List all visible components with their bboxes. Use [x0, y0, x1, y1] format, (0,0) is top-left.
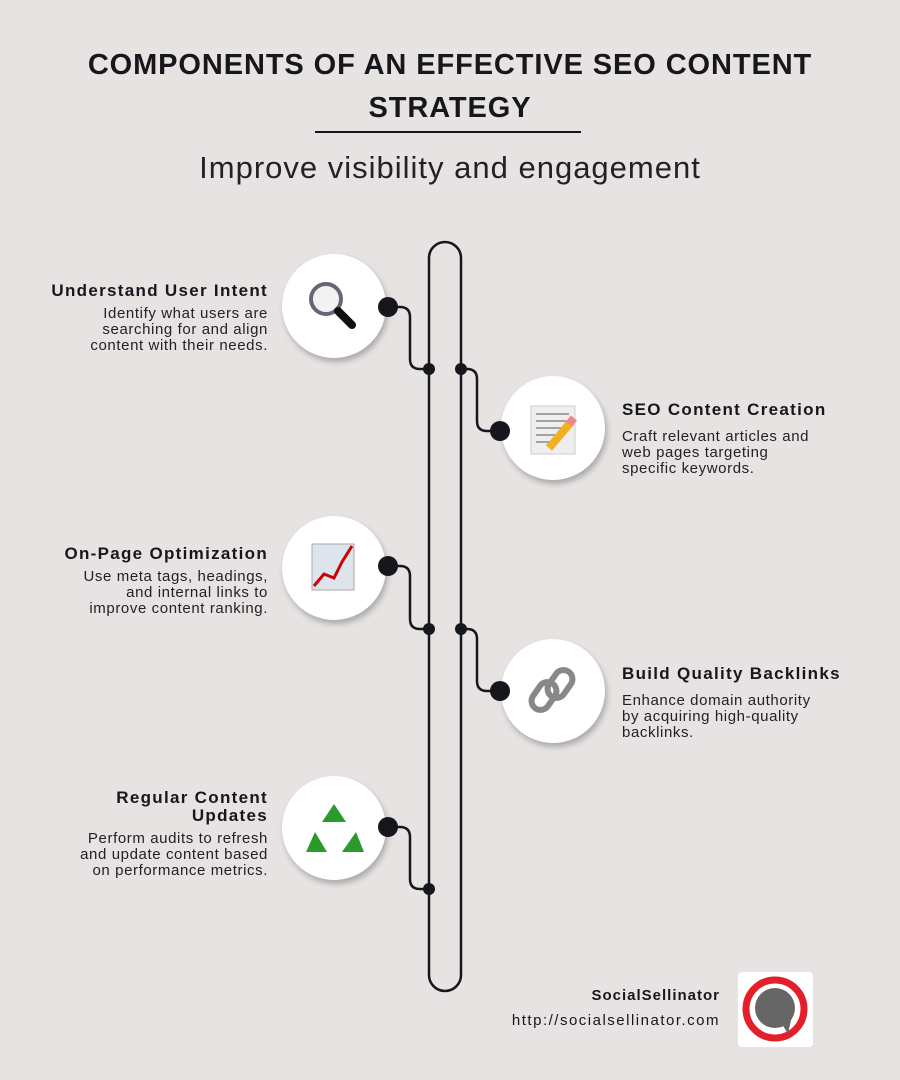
text: Understand User Intent: searching for and align [102, 321, 268, 338]
text: SEO Content Creation: SEO Content Creation [622, 400, 827, 419]
text: Regular Content Updates: Updates [192, 806, 268, 825]
logo [738, 972, 813, 1047]
item 4 circle [501, 639, 605, 743]
subtitle: Improve visibility and engagement [199, 150, 701, 185]
text: Understand User Intent [51, 281, 268, 354]
item 3 circle [282, 516, 386, 620]
text: Build Quality Backlinks: backlinks. [622, 724, 694, 741]
text: On-Page Optimization: On-Page Optimization [64, 544, 268, 563]
text: Regular Content Updates [80, 788, 268, 879]
text: On-Page Optimization: Use meta tags, headings, [84, 568, 268, 585]
text: Understand User Intent: content with their needs. [90, 337, 268, 354]
item 1 circle [282, 254, 386, 358]
footer brand: SocialSellinator [591, 987, 720, 1004]
title: COMPONENTS OF AN EFFECTIVE SEO CONTENT STRATEGY [88, 49, 812, 124]
text: Regular Content Updates: Perform audits to refresh [88, 830, 268, 847]
footer brand: http://socialsellinator.com [512, 1012, 720, 1029]
text: Regular Content Updates: Regular Content [116, 788, 268, 807]
text: Understand User Intent: Identify what users are [103, 305, 268, 322]
text: On-Page Optimization: improve content ranking. [89, 600, 268, 617]
item 2 circle [501, 376, 605, 480]
text: On-Page Optimization: and internal links to [126, 584, 268, 601]
item 5 circle [282, 776, 386, 880]
text: Build Quality Backlinks: Build Quality Backlinks [622, 664, 841, 683]
text: Regular Content Updates: on performance metrics. [92, 862, 268, 879]
text: SEO Content Creation: web pages targeting [622, 444, 768, 461]
text: On-Page Optimization [64, 544, 268, 617]
text: Build Quality Backlinks: by acquiring high-quality [622, 708, 799, 725]
footer brand [512, 987, 720, 1029]
text: Build Quality Backlinks [622, 664, 841, 741]
text: SEO Content Creation: specific keywords. [622, 460, 755, 477]
text: Build Quality Backlinks: Enhance domain authority [622, 692, 811, 709]
text: SEO Content Creation [622, 400, 827, 477]
text: Regular Content Updates: and update content based [80, 846, 268, 863]
text: Understand User Intent: Understand User Intent [51, 281, 268, 300]
text: SEO Content Creation: Craft relevant articles and [622, 428, 809, 445]
